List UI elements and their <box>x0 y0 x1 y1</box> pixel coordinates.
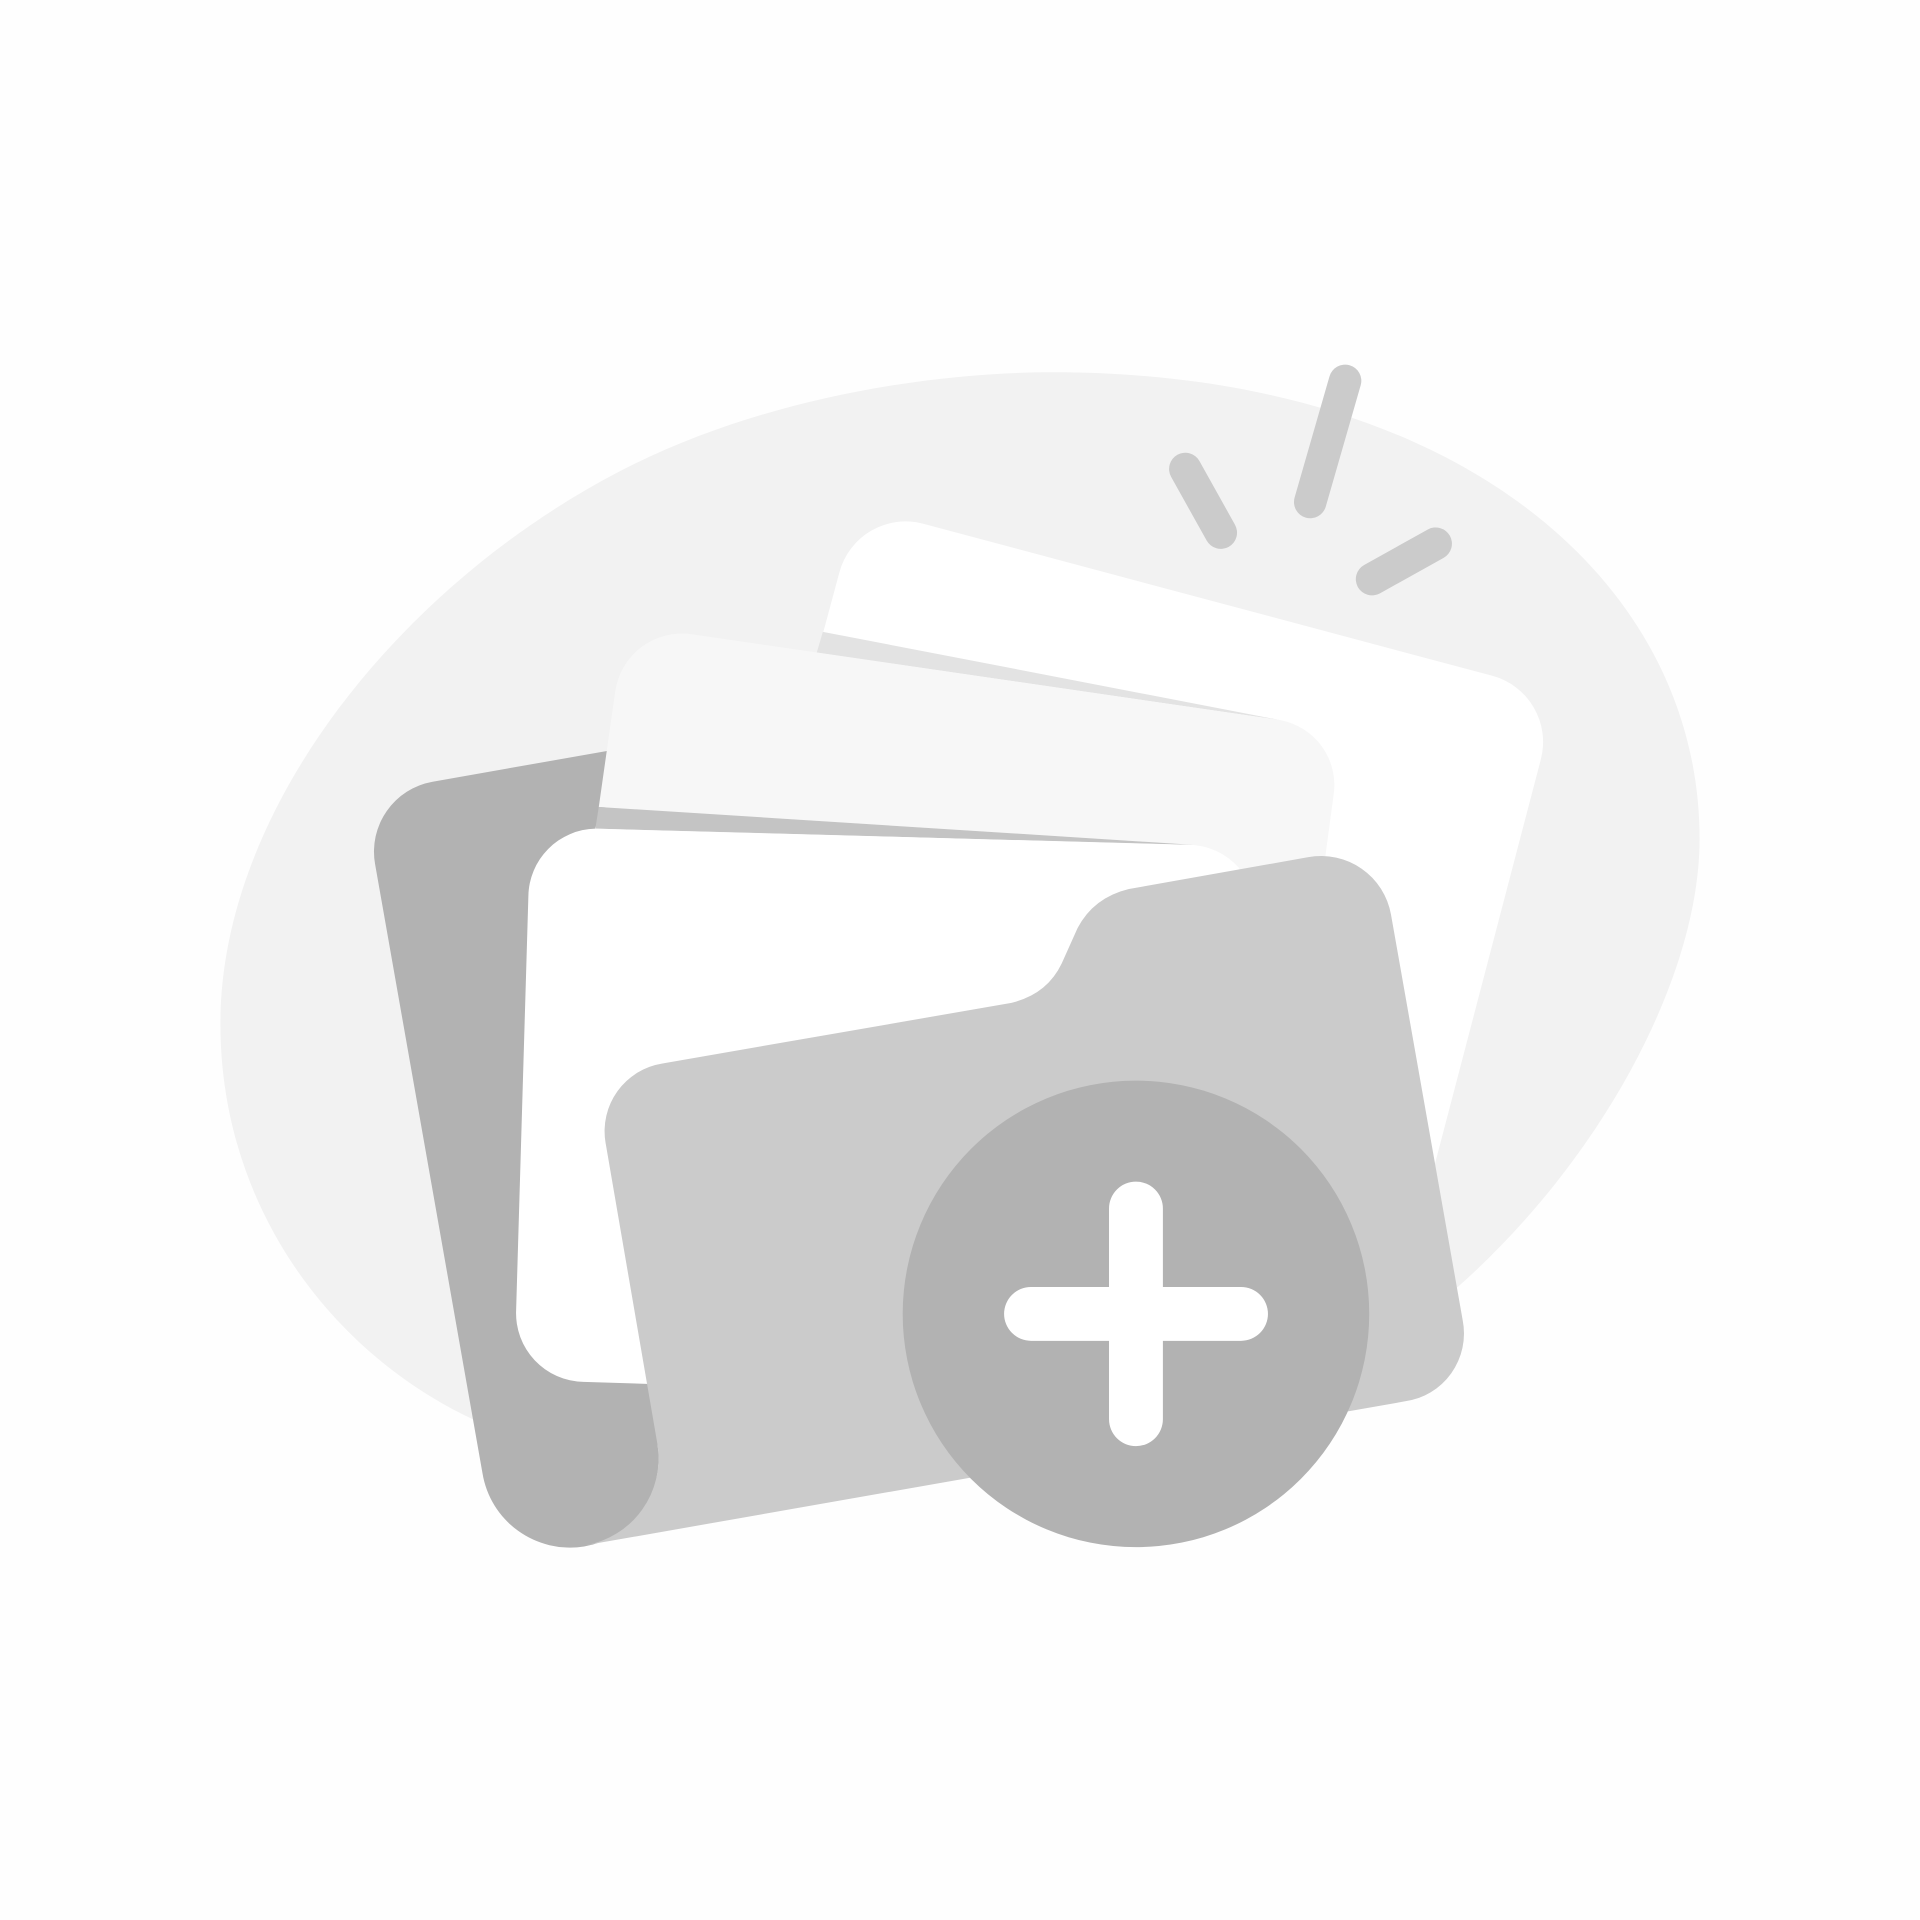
sparkle right <box>1372 544 1436 579</box>
sparkle left <box>1185 469 1221 533</box>
back white card <box>735 521 1543 1224</box>
shadow on middle card <box>595 807 1194 845</box>
shadow on back card <box>817 632 1280 720</box>
background blob <box>220 372 1700 1469</box>
folder front panel <box>585 856 1464 1545</box>
button circle <box>903 1081 1369 1547</box>
front white sheet <box>516 829 1273 1387</box>
plus icon <box>1031 1209 1241 1419</box>
folder back panel <box>374 746 661 1548</box>
add button <box>903 1081 1369 1547</box>
sparkle middle <box>1310 381 1345 502</box>
middle light card <box>599 634 1334 894</box>
sparkle lines <box>1185 381 1436 579</box>
